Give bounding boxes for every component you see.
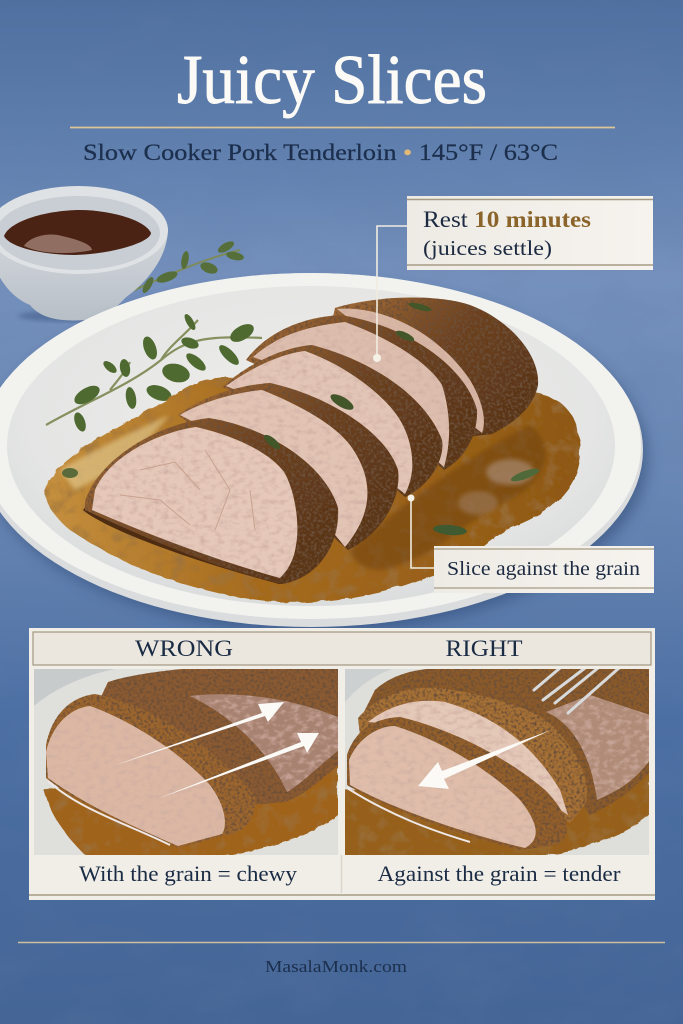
sauce bowl [0, 186, 168, 322]
photo: right cut [340, 665, 655, 860]
front slice [347, 717, 567, 850]
callout: slice against the grain [408, 494, 654, 593]
slice 1: front [83, 418, 338, 584]
bowl sauce [4, 210, 151, 255]
slice 3 [222, 345, 442, 497]
title divider [70, 126, 615, 128]
middle slice [358, 687, 587, 823]
panel: wrong vs right comparison [29, 628, 655, 900]
sauce pool [46, 378, 581, 602]
arrow: with the grain, lower [157, 733, 319, 799]
photo: wrong cut [34, 664, 345, 860]
subtitle: Slow Cooker Pork Tenderloin • 145°F / 63°C [83, 140, 558, 165]
footer: website: MasalaMonk.com [265, 957, 407, 976]
heading: right: RIGHT [446, 636, 522, 661]
callout: rest time [373, 196, 653, 362]
back slices [102, 669, 338, 804]
herb garnishes on crust [262, 301, 432, 451]
leader line: rest [373, 226, 407, 362]
caption: wrong: With the grain = chewy [79, 861, 297, 886]
arrow: against the grain [418, 730, 551, 789]
slice 5: back [330, 298, 538, 440]
title: Juicy Slices [177, 42, 487, 119]
plate [0, 273, 648, 632]
caption strip divider [340, 855, 342, 893]
front slice [46, 694, 255, 848]
callout: rest time: (juices settle) [423, 236, 552, 260]
back slices [360, 665, 655, 815]
slice 2 [178, 383, 398, 550]
slice 4 [246, 315, 477, 470]
thyme sprig on plate [46, 312, 262, 433]
arrow: with the grain, upper [113, 702, 284, 766]
heading: wrong: WRONG [135, 636, 233, 661]
slice text: Slice against the grain [447, 558, 640, 580]
footer divider [18, 942, 665, 944]
caption rule [29, 894, 655, 896]
icon: fork [534, 668, 619, 713]
leader line: slice [408, 494, 434, 568]
header bar [33, 632, 651, 665]
caption: right: Against the grain = tender [378, 861, 621, 886]
thyme behind bowl [86, 239, 245, 312]
tenderloin slices [83, 298, 538, 584]
rest text: Rest 10 minutes [423, 207, 591, 232]
